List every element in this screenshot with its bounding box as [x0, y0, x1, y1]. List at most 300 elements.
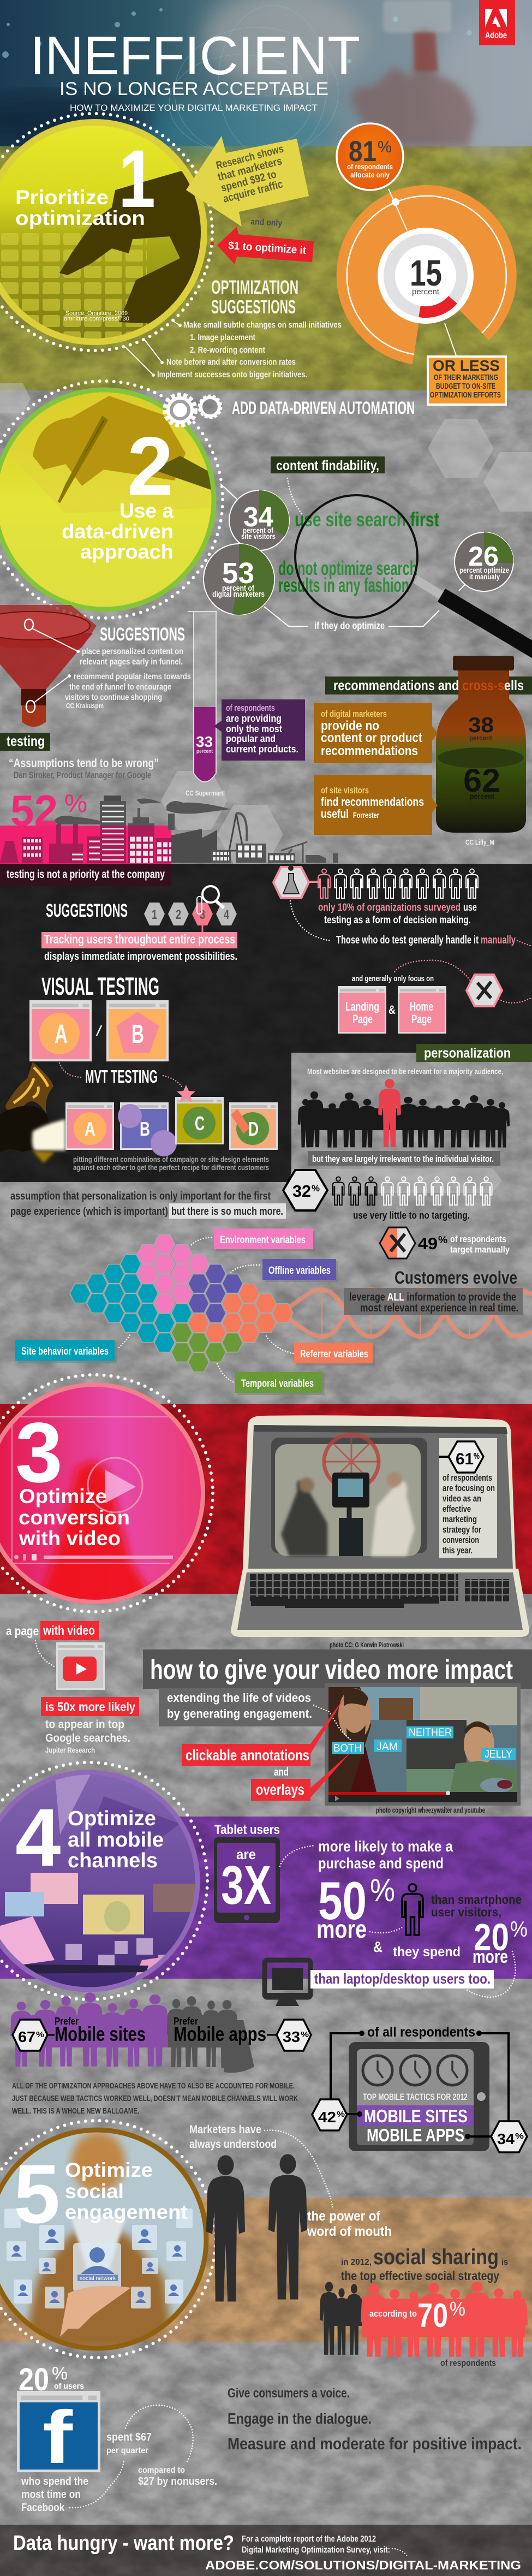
decorative hexagons: [0, 383, 532, 864]
panel: 61 percent: of respondents: [443, 1473, 492, 1483]
text: social sharing: [341, 2245, 508, 2283]
label: content findability: content findability,: [276, 458, 379, 473]
pie chart: 53 percent: [204, 544, 274, 615]
text: who spend the most time: who spend the: [21, 2476, 88, 2488]
text: spent $67 per quarter: [106, 2431, 152, 2455]
stat: they spend 20 percent more: 20: [474, 1916, 509, 1958]
green text under magnifier: [278, 508, 439, 596]
suggestions list: Note before and after conversion rates: [166, 358, 296, 367]
text block: all of the optimization approaches: ALL OF THE OPTIMIZATION APPROACHES ABOVE HAVE TO ALSO BE ACCOUNTED FOR MOBILE.: [12, 2081, 295, 2091]
text: who spend the most time: most time on: [21, 2489, 81, 2501]
callout: of respondents 33 percent: popular and: [226, 733, 276, 744]
hexagon stat: 42 percent: 42: [318, 2109, 336, 2126]
heading text: recommendations and cross-sells: recommendations and cross-sells: [333, 677, 524, 693]
crowd silhouette: 70 percent: [361, 2282, 528, 2357]
dotted ring 4: [0, 1762, 207, 1999]
panel: 61 percent: this year.: [443, 1545, 473, 1556]
stat: 52 percent: [10, 786, 87, 835]
label: 50x more likely: [41, 1697, 139, 1754]
callout: find recommendations useful: find recommendations: [321, 795, 424, 809]
dotted ring 1: [0, 114, 212, 351]
title: [30, 25, 360, 113]
label: environment variables: [214, 1228, 315, 1251]
pie chart: 53 percent: percent of: [222, 584, 255, 593]
stat: 52 percent: %: [64, 789, 87, 817]
callout: find recommendations useful: Forrester: [353, 811, 379, 820]
title: HOW TO MAXIMIZE YOUR DIGITAL MARKETING IMPACT: [70, 103, 318, 113]
hexagon stat: 49 percent: 49: [418, 1234, 438, 1253]
page icon: version A: A: [55, 1020, 68, 1049]
label: 50x more likely: Jupiter Research: [45, 1746, 95, 1754]
icon: facebook page: [17, 2391, 100, 2479]
stat: 20 percent of users: %: [52, 2363, 68, 2383]
text: assumption: [10, 1190, 286, 1219]
page icon: home page: [398, 986, 446, 1034]
heading: data hungry: Data hungry - want more?: [13, 2532, 234, 2555]
label: of all respondents: of all respondents: [367, 2025, 475, 2040]
label: offline variables: Offline variables: [268, 1265, 331, 1277]
pink testing box: [0, 826, 171, 864]
panel: 61 percent: marketing: [443, 1514, 477, 1524]
text: only 10 percent: testing as a form of decision making.: [324, 915, 471, 926]
callout: provide no recommendations: content or product: [321, 731, 422, 745]
text: spent $67 per quarter: per quarter: [106, 2446, 148, 2455]
label: prefer mobile apps: Mobile apps: [174, 2023, 266, 2045]
panel: step 4 mobile channels: [0, 1762, 528, 2152]
logo: Adobe: [479, 0, 515, 45]
photo credits: CC Lilly_M: [465, 838, 494, 846]
hexagon stat: 33 percent: %: [301, 2030, 309, 2039]
photo credit: photo copyright wheezywaiter and youtube: [376, 1806, 485, 1814]
funnel suggestions text: [65, 647, 191, 710]
heading: use a data-driven approach: approach: [80, 541, 174, 563]
page icon: MVT D: [229, 1102, 278, 1150]
heading: optimize conversion with video: with video: [19, 1527, 121, 1550]
panel: personalization: [10, 1044, 532, 1395]
text: assumption: page experience (which is important): [10, 1206, 168, 1218]
callout: or less: OF THEIR MARKETING: [434, 373, 498, 382]
label: 50x more likely: to appear in top: [45, 1718, 124, 1731]
caption bar: largely irrelevant: [308, 1151, 500, 1166]
source note: Source: Omniture. 2009: [65, 310, 128, 317]
dotted ring 2: [0, 381, 223, 618]
label: 50x more likely: is 50x more likely: [45, 1700, 135, 1714]
text block: all of the optimization approaches: [12, 2081, 298, 2116]
panel: testing on dark background: [0, 865, 532, 1172]
hexagon stat: 34 percent: 34: [497, 2130, 515, 2147]
funnel suggestions text: place personalized content on: [82, 647, 183, 656]
text block: leverage all information: [344, 1288, 523, 1315]
page icon: version B: B: [131, 1020, 144, 1049]
page icon: MVT D: D: [248, 1118, 259, 1140]
label: a page with video: with video: [43, 1623, 95, 1637]
funnel suggestions text: relevant pages early in funnel.: [80, 657, 183, 667]
hexagon stat: 49 percent: %: [438, 1234, 447, 1245]
photo circle: social network: [0, 2128, 211, 2351]
text: who spend the most time: Facebook: [21, 2502, 65, 2514]
panel: 61 percent: effective: [443, 1504, 471, 1514]
hexagon stat: 42 percent: %: [337, 2110, 345, 2119]
red label: overlays: [251, 1752, 351, 1801]
text: complete report: Digital Marketing Optimization Survey, visit:: [242, 2545, 390, 2555]
pie chart: 26 percent: it manualy: [469, 572, 500, 581]
MVT description: [73, 1155, 269, 1172]
DNA strand illustration: [273, 1290, 532, 1337]
text block: all of the optimization approaches: WELL. THIS IS A WHOLE NEW BALLGAME.: [12, 2106, 139, 2116]
label: environment variables: Environment variables: [220, 1234, 306, 1246]
callout: of respondents 33 percent: [214, 699, 305, 761]
callout: or less: OR LESS: [433, 357, 500, 374]
hexagon stat: 34 percent: %: [515, 2132, 524, 2141]
icon: tools hexagon: [467, 975, 502, 1006]
stat: 20 percent of users: of users: [54, 2382, 84, 2391]
funnel suggestions text: visitors to continue shopping: [65, 693, 162, 702]
panel: 61 percent: conversion: [443, 1535, 479, 1545]
silhouette: two men talking: [206, 2154, 307, 2301]
illustration: fire: [0, 1062, 65, 1163]
numbered hexagons: [144, 903, 237, 932]
leader lines: [220, 484, 465, 626]
overlay labels on video: [332, 1726, 516, 1760]
page icon: MVT B: B: [140, 1118, 150, 1140]
pie chart: 26 percent: 26: [468, 541, 499, 572]
suggestions list: 2. Re-wording content: [190, 346, 266, 355]
label: referrer variables: Referrer variables: [300, 1349, 368, 1360]
text: compared to $27: compared to: [138, 2466, 185, 2475]
text: handle it manually: manually: [481, 934, 516, 946]
heading: optimize all mobile channels: [68, 1807, 164, 1872]
text box: extending the life of videos: extending the life of videos: [167, 1691, 311, 1705]
suggestions list: Implement successes onto bigger initiatives.: [157, 370, 307, 379]
heading: optimize conversion with video: [19, 1485, 130, 1550]
text: marketers have always understood: Marketers have: [189, 2123, 261, 2136]
text: assumption: assumption that personalization is only important for the first: [10, 1190, 271, 1202]
text: social sharing: the top effective social strategy: [341, 2269, 499, 2283]
caption bar: testing is not a priority: testing is not a priority at the company: [7, 868, 165, 881]
pie chart: 34 percent: percent of: [243, 526, 273, 535]
quote: Dan Siroker, Product Manager for Google: [14, 770, 151, 780]
pie chart: 26 percent: percent optimize: [459, 566, 509, 574]
callout: of respondents 33 percent: are providing: [226, 713, 282, 724]
icon: three clocks: [363, 2056, 467, 2085]
page icon: MVT A: [65, 1102, 114, 1150]
arrow callout: research: [186, 136, 309, 227]
stat: 50 percent more: [316, 1871, 395, 1943]
panel: 61 percent: are focusing on: [443, 1483, 495, 1493]
stat: 20 percent of users: [19, 2362, 84, 2397]
label: content findability: [271, 456, 385, 514]
text: who spend the most time: [21, 2476, 88, 2514]
label: prefer mobile apps: Prefer: [174, 2016, 198, 2027]
stat circle: 81 percent: %: [378, 138, 392, 156]
icon: test tube 33 percent: 33: [196, 733, 213, 750]
icon: tablet with top mobile tactics: MOBILE APPS: [367, 2125, 464, 2145]
donut chart: 15 percent: percent: [412, 287, 440, 296]
panel: 61 percent: [439, 1438, 497, 1558]
donut chart: 15 percent: 15: [410, 253, 442, 294]
heading: suggestions: SUGGESTIONS: [46, 900, 128, 921]
text: the power of word of mouth: the power of: [307, 2209, 381, 2224]
red arrow: $1 to optimize it: $1 to optimize it: [228, 240, 307, 257]
callout: provide no recommendations: of digital marketers: [321, 709, 387, 719]
overlay labels on video: BOTH: [333, 1743, 362, 1754]
numbered hexagons: 1: [152, 907, 157, 922]
red label: overlays: overlays: [256, 1781, 304, 1798]
pink banner: tracking users: [41, 932, 237, 948]
stat: according to 70 percent: according to: [369, 2308, 417, 2319]
label: site behavior variables: Site behavior variables: [21, 1346, 109, 1357]
donut chart: 15 percent: [337, 185, 517, 364]
stat: 52 percent: 52: [10, 786, 58, 835]
hexagon stat: 33 percent: [267, 2020, 311, 2051]
heading: optimize all mobile channels: all mobile: [68, 1829, 164, 1851]
heading: prioritize optimization: Prioritize: [15, 186, 109, 209]
MVT description: against each other to get the perfect recipe for different customers: [73, 1163, 269, 1172]
stat circle: 81 percent: [337, 123, 403, 190]
icon: test tube 33 percent: percent: [196, 749, 213, 755]
stat: they spend 20 percent more: %: [510, 1918, 528, 1942]
numbered hexagons: 4: [224, 907, 229, 922]
factory skyline illustration: [0, 796, 338, 863]
dotted ring 5: [0, 2121, 216, 2358]
text: compared to $27: $27 by nonusers.: [138, 2476, 217, 2488]
callout: or less: OPTIMIZATION EFFORTS: [430, 390, 501, 400]
hexagon stat: 67 percent: 67: [18, 2028, 35, 2045]
hexagon stat: 32 percent: 32: [292, 1182, 311, 1201]
hexagon stat: 49 percent: target manually: [450, 1244, 510, 1255]
funnel suggestions text: CC Krakuspm: [66, 702, 104, 710]
green text under magnifier: results in any fashion: [278, 574, 409, 596]
stat: they spend 20 percent more: they spend: [393, 1944, 461, 1960]
icon: magnifier with hand: [197, 886, 224, 914]
heading: use a data-driven approach: data-driven: [62, 520, 174, 543]
crowd silhouette: [298, 1079, 510, 1148]
icon: facebook page: f: [43, 2396, 73, 2479]
overlay labels on video: JAM: [376, 1741, 398, 1753]
page icon: home page: Page: [411, 1012, 432, 1026]
callout: find recommendations useful: [314, 775, 438, 835]
logo: Adobe: Adobe: [485, 30, 507, 40]
label: temporal variables: Temporal variables: [241, 1378, 314, 1390]
hexagon stat: 32 percent: %: [312, 1183, 320, 1194]
pie chart: 34 percent: 34: [243, 501, 274, 532]
light ribbon behind pictogram: [286, 1168, 502, 1193]
hexagon cluster: variables: [70, 1235, 293, 1372]
text: and generally only focus on: and generally only focus on: [352, 974, 434, 983]
heading: optimize social engagement: engagement: [65, 2201, 188, 2223]
icon: gears: [165, 395, 221, 425]
heading: MVT testing: MVT TESTING: [85, 1066, 158, 1087]
footer: [13, 2532, 521, 2572]
photo credit: photo CC: G Korwin Piotrowski: [330, 1641, 404, 1649]
icon: magnifying glass: [295, 495, 532, 652]
label: referrer variables: [294, 1343, 375, 1366]
stat circle: 81 percent: allocate only: [350, 170, 390, 179]
label: if they do optimize: if they do optimize: [314, 620, 385, 631]
heading: add data-driven automation: ADD DATA-DRIVEN AUTOMATION: [232, 398, 415, 418]
icon: desktop monitor: [265, 1960, 310, 2006]
heading: optimize social engagement: [65, 2159, 188, 2223]
pie chart: 53 percent: digital marketers: [212, 590, 265, 599]
photo circle: hands on tablet: [0, 1770, 200, 1992]
suggestions list: Make small subtle changes on small initiatives: [183, 320, 342, 330]
icon: tablet with top mobile tactics: MOBILE SITES: [364, 2106, 468, 2126]
heading: prioritize optimization: [15, 186, 145, 229]
arrow callout: research: Research shows: [215, 143, 285, 172]
heading: optimize all mobile channels: Optimize: [68, 1807, 156, 1830]
heading: optimize social engagement: social: [65, 2180, 124, 2203]
heading: prioritize optimization: optimization: [15, 207, 145, 229]
text: displays improvement: displays immediate improvement possibilities.: [44, 951, 237, 963]
heading: optimization suggestions: [211, 277, 298, 318]
heading: use a data-driven approach: Use a: [119, 500, 174, 522]
heading: visual testing: VISUAL TESTING: [41, 972, 159, 1000]
funnel suggestions text: recommend popular items towards: [74, 672, 191, 681]
text box: extending the life of videos: by generating engagement.: [167, 1707, 312, 1720]
number 5: 5: [14, 2147, 60, 2241]
photo credits: [186, 789, 494, 846]
text box: extending the life of videos: [159, 1688, 326, 1726]
video screenshot: [325, 1683, 521, 1806]
heading: optimize conversion with video: conversion: [19, 1506, 130, 1529]
label: of all respondents: [331, 2025, 509, 2121]
panel: 61 percent: strategy for: [443, 1524, 481, 1535]
hexagon stat: 33 percent: 33: [283, 2028, 300, 2045]
stat: according to 70 percent: 70: [417, 2297, 448, 2335]
text: complete report: For a complete report of the Adobe 2012: [242, 2535, 376, 2544]
callout: find recommendations useful: of site visitors: [321, 785, 369, 796]
hexagon stat: 32 percent: [283, 1170, 327, 1210]
arrow callout: research: spend $92 to: [220, 168, 278, 194]
panel: 61 percent: video as an: [443, 1493, 481, 1504]
icon: bottle 38 and 62 percent: 38: [468, 714, 494, 737]
icon: tablet with top mobile tactics: TOP MOBILE TACTICS FOR 2012: [363, 2092, 468, 2102]
photo circle: hand on keyboard: [0, 121, 206, 343]
MVT description: pitting different combinations of campaign or site design elements: [73, 1155, 269, 1164]
green text under magnifier: use site search first: [295, 508, 439, 531]
stat: 50 percent more: %: [370, 1873, 395, 1908]
page icon: version A: [29, 1000, 92, 1061]
heading: optimize social engagement: Optimize: [65, 2159, 153, 2181]
page icon: MVT C: C: [195, 1112, 205, 1135]
label: a page with video: a page: [6, 1624, 39, 1638]
text block: give consumers a voice: Give consumers a voice.: [228, 2386, 350, 2401]
pictogram: 10 people: [318, 869, 478, 898]
callout: provide no recommendations: provide no: [321, 719, 379, 733]
page icon: MVT A: A: [85, 1118, 95, 1140]
hexagon stat: 42 percent: [312, 2099, 362, 2130]
callout: provide no recommendations: recommendations: [321, 744, 418, 758]
hexagon stat: 67 percent: [13, 2020, 55, 2051]
panel: step 2 data-driven approach: [0, 381, 532, 886]
hexagon stat: 49 percent: [380, 1227, 510, 1259]
callout: find recommendations useful: useful: [321, 807, 349, 821]
callout: of respondents 33 percent: only the most: [226, 723, 282, 734]
numbered hexagons: 2: [176, 907, 181, 922]
panel: 61 percent: %: [474, 1452, 480, 1461]
heading: optimization suggestions: OPTIMIZATION: [211, 277, 298, 298]
icon: bottle 38 and 62 percent: [436, 656, 526, 833]
panel: 61 percent: 61: [456, 1450, 474, 1468]
pie chart: 53 percent: 53: [222, 557, 254, 590]
callout: provide no recommendations: [314, 703, 438, 763]
overlay labels on video: NEITHER: [409, 1727, 452, 1738]
page icon: version B: [106, 1000, 169, 1061]
number 3: 3: [15, 1405, 63, 1500]
text: social sharing: in 2012,: [341, 2258, 372, 2267]
quote: “Assumptions tend to be wrong”: [9, 756, 159, 770]
link: adobe digital marketing: ADOBE.COM/SOLUTIONS/DIGITAL-MARKETING: [205, 2558, 521, 2572]
page icon: landing page: Landing: [345, 1000, 379, 1013]
pink banner: tracking users: Tracking users throughout entire process: [44, 932, 235, 946]
text block: give consumers a voice: Engage in the dialogue.: [228, 2410, 372, 2427]
text: assumption: but there is so much more.: [171, 1206, 283, 1218]
ampersand: &: [388, 1003, 396, 1017]
stat: they spend 20 percent more: &: [373, 1938, 382, 1955]
text block: give consumers a voice: [228, 2386, 522, 2453]
label: prefer mobile sites: [55, 2016, 146, 2045]
text: than smartphone user visitors: [431, 1892, 522, 1919]
text: marketers have always understood: always understood: [189, 2138, 277, 2151]
text: and: and: [274, 1766, 289, 1778]
text: spent $67 per quarter: spent $67: [106, 2431, 152, 2443]
text: tablet users: Tablet users: [214, 1823, 280, 1837]
pie chart: 26 percent: [455, 532, 513, 591]
crowd silhouette: purple majority: [10, 1992, 169, 2067]
text: of respondents: of respondents: [440, 2359, 496, 2368]
red label: clickable annotations: clickable annotations: [186, 1747, 309, 1764]
text: the power of word of mouth: [307, 2209, 392, 2239]
icon: tablet 3X: are: [236, 1846, 256, 1862]
icon: test tube 33 percent: [188, 612, 217, 782]
page icon: MVT C: [175, 1097, 224, 1144]
label: temporal variables: [235, 1372, 325, 1395]
heading: suggestions: SUGGESTIONS: [100, 624, 185, 645]
callout: or less: [428, 357, 506, 405]
panel: step 5 social engagement: [0, 2121, 528, 2514]
stat: 50 percent more: 50: [318, 1871, 367, 1931]
text: more likely to make a purchase: more likely to make a: [318, 1838, 453, 1855]
pictogram: 3 of 10 people: [332, 1177, 492, 1205]
text: only 10 percent: use: [463, 902, 477, 913]
text: only 10 percent: only 10% of organizations surveyed: [318, 902, 461, 913]
text block: all of the optimization approaches: JUST BECAUSE WEB TACTICS WORKED WELL, DOESN’T MEAN MOBILE CHANNELS WILL WORK: [12, 2094, 298, 2103]
dotted ring 3: [0, 1375, 213, 1612]
text: compared to $27: [138, 2466, 217, 2488]
suggestions list: [125, 320, 342, 379]
suggestions list: 1. Image placement: [190, 333, 256, 342]
text: social sharing: is: [501, 2258, 508, 2267]
callout: of respondents 33 percent: of respondents: [226, 703, 275, 713]
stat: 20 percent of users: 20: [19, 2362, 49, 2397]
label: prefer mobile sites: Mobile sites: [55, 2023, 146, 2045]
text: complete report: [242, 2535, 390, 2555]
label: prefer mobile apps: [174, 2016, 266, 2045]
and only: and only: [250, 217, 283, 228]
heading: optimization suggestions: SUGGESTIONS: [211, 296, 296, 318]
hexagon stat: 34 percent: [465, 2121, 527, 2152]
stat: they spend 20 percent more: [373, 1916, 528, 1967]
page icon: landing page: Page: [352, 1012, 373, 1026]
panel: step 3 video: [0, 1375, 532, 1814]
icon: tablet with top mobile tactics: [349, 2042, 489, 2151]
icon: tablet 3X: 3X: [221, 1855, 271, 1916]
text: than smartphone user visitors: than smartphone: [431, 1892, 522, 1907]
arrow callout: research: acquire traffic: [222, 178, 284, 205]
heading: use a data-driven approach: [62, 500, 174, 563]
pie chart: 34 percent: [229, 490, 289, 550]
text: than smartphone user visitors: user visitors,: [431, 1905, 501, 1919]
